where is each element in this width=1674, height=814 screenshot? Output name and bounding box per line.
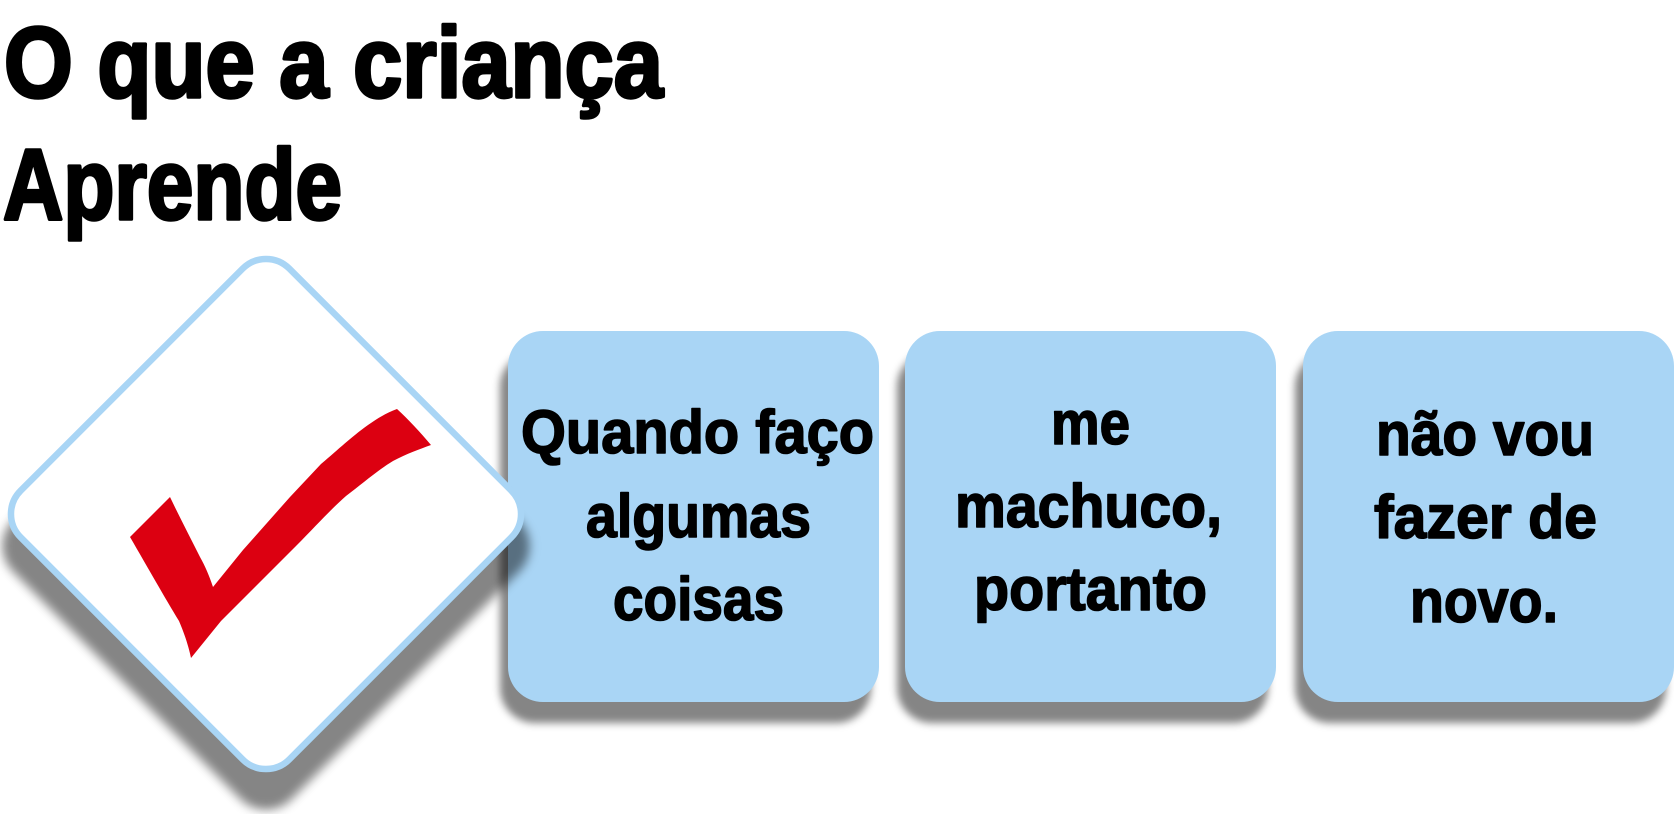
- card 2 text: [955, 389, 1222, 623]
- card 1 text: algumas: [586, 482, 811, 550]
- card 2 text: me: [1051, 389, 1130, 457]
- title: [3, 7, 664, 241]
- panel: card 2: [897, 331, 1276, 723]
- title: O que a criança: [4, 7, 664, 119]
- title: Aprende: [3, 129, 342, 241]
- icon: red check mark: [130, 409, 431, 658]
- card 1 text: coisas: [613, 565, 784, 633]
- card 2 text: machuco,: [955, 472, 1222, 540]
- card 1 text: [521, 398, 874, 633]
- card 3 text: fazer de: [1374, 483, 1597, 551]
- card 3 text: novo.: [1410, 567, 1558, 635]
- card 3 text: [1374, 400, 1597, 635]
- card 1 text: Quando faço: [521, 398, 874, 466]
- panel: check diamond: [0, 245, 545, 814]
- panel: card 1: [500, 331, 879, 723]
- card 2 text: portanto: [974, 555, 1207, 623]
- panel: card 3: [1295, 331, 1674, 723]
- card 3 text: não vou: [1376, 400, 1594, 468]
